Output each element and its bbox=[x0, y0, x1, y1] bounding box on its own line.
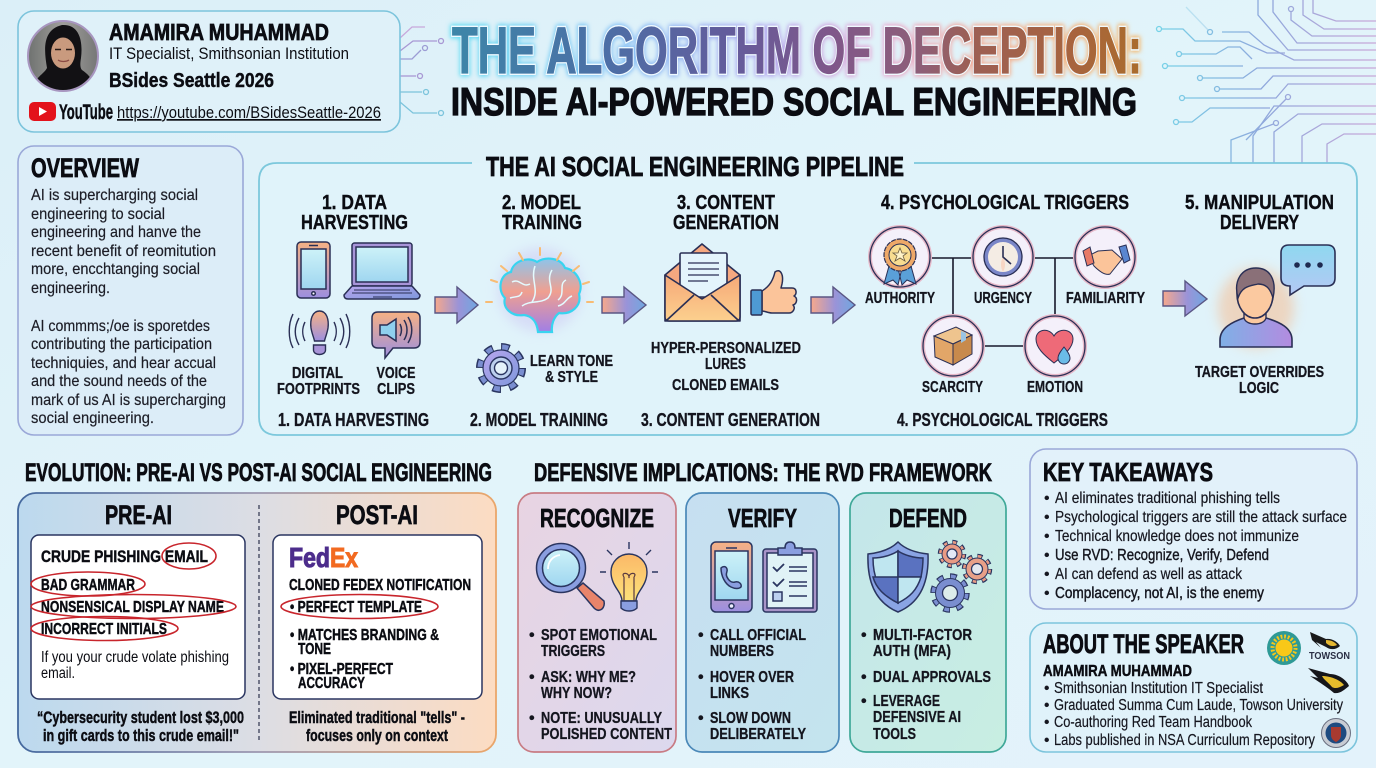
label: learn tone and style: LEARN TONE bbox=[530, 353, 613, 370]
step 5: manipulation delivery bbox=[1185, 192, 1335, 397]
event name: BSides Seattle 2026 bbox=[109, 70, 274, 92]
label: digital footprints bbox=[277, 365, 360, 398]
takeaways list bbox=[1044, 490, 1347, 602]
logo: smithsonian sun bbox=[1267, 631, 1301, 665]
verify list: SLOW DOWN bbox=[710, 710, 791, 727]
panel: about the speaker: ABOUT THE SPEAKER bbox=[1043, 629, 1244, 659]
panel: recognize: RECOGNIZE bbox=[540, 503, 654, 533]
heading: defensive implications: DEFENSIVE IMPLICATIONS: THE RVD FRAMEWORK bbox=[534, 459, 992, 487]
logo: fedex: Ex bbox=[330, 542, 358, 573]
verify list bbox=[698, 627, 806, 743]
icon: magnifying glass bbox=[536, 544, 604, 610]
step 5: manipulation delivery: 5. MANIPULATION bbox=[1185, 192, 1334, 214]
recognize list: NOTE: UNUSUALLY bbox=[541, 710, 662, 727]
arrow: step 2 to 3 bbox=[602, 287, 646, 323]
takeaways list: Complacency, not AI, is the enemy bbox=[1055, 585, 1264, 602]
step 1: data harvesting: HARVESTING bbox=[301, 212, 408, 234]
cloned fedex card: ACCURACY bbox=[298, 675, 365, 692]
defend list: • bbox=[861, 669, 867, 686]
column: post-AI: POST-AI bbox=[336, 500, 418, 530]
step 4: psychological triggers bbox=[865, 192, 1145, 430]
defend list: DUAL APPROVALS bbox=[873, 669, 991, 686]
recognize list: ASK: WHY ME? bbox=[541, 669, 636, 686]
speaker portrait bbox=[28, 21, 98, 92]
icon: smartphone bbox=[297, 242, 330, 298]
post-AI note: Eliminated traditional "tells" - bbox=[289, 708, 465, 727]
defend list: • bbox=[861, 693, 867, 710]
crude phishing email card: If you your crude volate phishing bbox=[41, 649, 229, 666]
panel: key takeaways: KEY TAKEAWAYS bbox=[1043, 457, 1213, 487]
defend list: • bbox=[861, 627, 867, 644]
takeaways list: AI can defend as well as attack bbox=[1055, 566, 1243, 583]
cloned fedex card: • PERFECT TEMPLATE bbox=[290, 599, 422, 616]
cloned fedex card: TONE bbox=[298, 641, 331, 658]
crude phishing email card: BAD GRAMMAR bbox=[41, 577, 135, 594]
step 4: psychological triggers: 4. PSYCHOLOGICAL TRIGGERS bbox=[881, 192, 1129, 214]
label: digital footprints: DIGITAL bbox=[292, 365, 343, 382]
overview paragraph two: contributing the participation bbox=[31, 336, 212, 353]
panel: defend: DEFEND bbox=[889, 503, 967, 533]
logo: towson small tiger: TOWSON bbox=[1309, 651, 1350, 662]
speaker bio list: Co-authoring Red Team Handbook bbox=[1054, 714, 1252, 731]
arrow: step 4 to 5 bbox=[1163, 281, 1207, 316]
logo: fedex: Fed bbox=[289, 542, 330, 573]
step 3: content generation bbox=[641, 192, 820, 430]
speaker bio list: • bbox=[1044, 732, 1049, 749]
defend list: AUTH (MFA) bbox=[873, 643, 951, 660]
overview paragraph one: AI is supercharging social bbox=[31, 187, 198, 204]
caption: psychological triggers: 4. PSYCHOLOGICAL TRIGGERS bbox=[897, 410, 1108, 430]
speaker name: AMAMIRA MUHAMMAD bbox=[1043, 663, 1192, 680]
overview paragraph one bbox=[31, 187, 216, 297]
icon: shield bbox=[868, 542, 928, 612]
takeaways list: • bbox=[1044, 566, 1050, 583]
takeaways list: Technical knowledge does not immunize bbox=[1055, 528, 1299, 545]
logo: towson small tiger bbox=[1309, 632, 1350, 662]
verify list: • bbox=[698, 710, 704, 727]
pre-AI quote bbox=[37, 708, 244, 745]
speaker role: IT Specialist, Smithsonian Institution bbox=[109, 44, 349, 63]
pipeline heading: THE AI SOCIAL ENGINEERING PIPELINE bbox=[486, 151, 904, 182]
overview paragraph two: social engineering. bbox=[31, 410, 154, 427]
label: voice clips: CLIPS bbox=[377, 381, 415, 398]
step 1: data harvesting: 1. DATA bbox=[322, 192, 387, 214]
youtube link: https://youtube.com/BSidesSeattle-2026 bbox=[117, 103, 381, 122]
verify list: • bbox=[698, 627, 704, 644]
takeaways list: Use RVD: Recognize, Verify, Defend bbox=[1055, 547, 1269, 564]
defend list: MULTI-FACTOR bbox=[873, 627, 972, 644]
takeaways list: • bbox=[1044, 490, 1050, 507]
arrow: step 1 to 2 bbox=[435, 287, 478, 323]
verify list: DELIBERATELY bbox=[710, 726, 806, 743]
step 3: content generation: GENERATION bbox=[673, 212, 779, 234]
cloned fedex card: CLONED FEDEX NOTIFICATION bbox=[289, 577, 471, 594]
recognize list bbox=[529, 627, 672, 743]
overview paragraph two bbox=[31, 318, 226, 427]
verify list: CALL OFFICIAL bbox=[710, 627, 806, 644]
label: voice clips bbox=[376, 365, 416, 398]
icon: light bulb bbox=[600, 542, 658, 611]
post-AI note: focuses only on context bbox=[306, 726, 448, 745]
step 2: model training: 2. MODEL bbox=[502, 192, 581, 214]
crude phishing email card: INCORRECT INITIALS bbox=[41, 621, 167, 638]
icon: small gear peach bbox=[965, 557, 989, 581]
caption: model training: 2. MODEL TRAINING bbox=[470, 410, 608, 430]
step 5: manipulation delivery: DELIVERY bbox=[1220, 212, 1300, 234]
column: pre-AI bbox=[31, 500, 245, 745]
trigger: emotion: EMOTION bbox=[1027, 379, 1083, 396]
crude phishing email card: CRUDE PHISHING EMAIL bbox=[41, 547, 208, 566]
crude phishing email card: email. bbox=[41, 665, 75, 682]
icon: checklist clipboard bbox=[763, 542, 817, 612]
cloned fedex card bbox=[273, 535, 482, 699]
icon: laptop bbox=[344, 243, 420, 299]
label: target overrides logic: LOGIC bbox=[1239, 380, 1279, 397]
label: hyper-personalized lures: LURES bbox=[705, 356, 746, 373]
icon: small gear orange bbox=[941, 543, 963, 565]
label: target overrides logic: TARGET OVERRIDES bbox=[1195, 364, 1324, 381]
icon: glowing brain bbox=[486, 248, 593, 332]
panel: defend bbox=[850, 493, 1006, 752]
trigger: emotion bbox=[1025, 316, 1085, 396]
icon: phone call bbox=[711, 542, 752, 612]
trigger: scarcity: SCARCITY bbox=[922, 379, 983, 396]
overview paragraph one: engineering. bbox=[31, 280, 110, 297]
icon: large gear blue bbox=[934, 577, 966, 609]
overview paragraph one: engineering and hanve the bbox=[31, 224, 201, 241]
icon: target person bbox=[1218, 268, 1294, 348]
speaker bio list bbox=[1044, 680, 1343, 749]
takeaways list: • bbox=[1044, 547, 1050, 564]
icon: open envelope bbox=[665, 244, 740, 321]
panel: speaker card bbox=[18, 11, 400, 132]
label: learn tone and style: & STYLE bbox=[545, 369, 598, 386]
overview paragraph two: and the sound needs of the bbox=[31, 373, 207, 390]
label: digital footprints: FOOTPRINTS bbox=[277, 381, 360, 398]
speaker bio list: Smithsonian Institution IT Specialist bbox=[1054, 680, 1264, 697]
speaker bio list: • bbox=[1044, 697, 1049, 714]
trigger: urgency bbox=[973, 227, 1033, 307]
panel: key takeaways bbox=[1030, 449, 1357, 609]
step 2: model training bbox=[470, 192, 613, 430]
panel: AI social engineering pipeline bbox=[259, 151, 1357, 435]
trigger: authority bbox=[865, 227, 935, 307]
icon: thumbs up bbox=[751, 271, 797, 315]
takeaways list: • bbox=[1044, 509, 1050, 526]
step 1: data harvesting bbox=[277, 192, 429, 430]
label: voice clips: VOICE bbox=[376, 365, 416, 382]
recognize list: • bbox=[529, 669, 535, 686]
caption: content generation: 3. CONTENT GENERATION bbox=[641, 410, 820, 430]
crude phishing email card bbox=[31, 535, 245, 699]
trigger: urgency: URGENCY bbox=[974, 290, 1032, 307]
crude phishing email card: NONSENSICAL DISPLAY NAME bbox=[41, 599, 224, 616]
label: hyper-personalized lures bbox=[651, 340, 801, 373]
overview paragraph two: techniquies, and hear accual bbox=[31, 355, 216, 372]
recognize list: TRIGGERS bbox=[541, 643, 605, 660]
speaker bio list: Labs published in NSA Curriculum Repository bbox=[1054, 732, 1315, 749]
overview heading: OVERVIEW bbox=[31, 153, 139, 183]
panel: verify: VERIFY bbox=[728, 503, 797, 533]
label: hyper-personalized lures: HYPER-PERSONALIZED bbox=[651, 340, 801, 357]
overview paragraph one: more, encchtanging social bbox=[31, 261, 200, 278]
label: target overrides logic bbox=[1195, 364, 1324, 397]
takeaways list: AI eliminates traditional phishing tells bbox=[1055, 490, 1280, 507]
verify list: LINKS bbox=[710, 685, 749, 702]
verify list: HOVER OVER bbox=[710, 669, 794, 686]
heading: evolution: EVOLUTION: PRE-AI VS POST-AI SOCIAL ENGINEERING bbox=[25, 459, 492, 487]
column: post-AI bbox=[273, 500, 482, 745]
label: cloned emails: CLONED EMAILS bbox=[672, 377, 779, 394]
cloned fedex card: • MATCHES BRANDING & bbox=[290, 627, 439, 644]
defend list: TOOLS bbox=[873, 726, 916, 743]
youtube wordmark: YouTube bbox=[59, 101, 113, 124]
recognize list: • bbox=[529, 710, 535, 727]
defend list bbox=[861, 627, 991, 743]
icon: gear bbox=[481, 348, 521, 388]
panel: verify bbox=[686, 493, 839, 752]
overview paragraph one: engineering to social bbox=[31, 206, 165, 223]
panel: overview bbox=[18, 146, 243, 435]
trigger: familiarity: FAMILIARITY bbox=[1066, 290, 1145, 307]
post-AI note bbox=[289, 708, 465, 745]
recognize list: POLISHED CONTENT bbox=[541, 726, 672, 743]
pre-AI quote: “Cybersecurity student lost $3,000 bbox=[37, 708, 244, 727]
speaker bio list: • bbox=[1044, 680, 1049, 697]
overview paragraph one: recent benefit of reomitution bbox=[31, 243, 216, 260]
arrow: step 3 to 4 bbox=[811, 287, 855, 323]
panel: recognize bbox=[518, 493, 676, 752]
verify list: • bbox=[698, 669, 704, 686]
logo: NSA seal bbox=[1322, 718, 1350, 748]
overview paragraph two: AI commms;/oe is sporetdes bbox=[31, 318, 210, 335]
trigger: familiarity bbox=[1066, 227, 1145, 307]
recognize list: SPOT EMOTIONAL bbox=[541, 627, 657, 644]
takeaways list: • bbox=[1044, 528, 1050, 545]
step 3: content generation: 3. CONTENT bbox=[677, 192, 775, 214]
trigger: scarcity bbox=[922, 316, 983, 396]
speaker name: AMAMIRA MUHAMMAD bbox=[109, 19, 329, 45]
logo: towson large tiger bbox=[1308, 668, 1349, 693]
panel: about the speaker bbox=[1030, 623, 1357, 752]
icon: voice clip bubble bbox=[372, 312, 420, 358]
icon: speech bubble bbox=[1281, 245, 1335, 295]
cloned fedex card: • PIXEL-PERFECT bbox=[290, 661, 393, 678]
column: pre-AI: PRE-AI bbox=[105, 500, 172, 530]
trigger: authority: AUTHORITY bbox=[865, 290, 935, 307]
speaker bio list: • bbox=[1044, 714, 1049, 731]
recognize list: • bbox=[529, 627, 535, 644]
label: learn tone and style bbox=[530, 353, 613, 386]
verify list: NUMBERS bbox=[710, 643, 774, 660]
recognize list: WHY NOW? bbox=[541, 685, 612, 702]
overview paragraph two: mark of us AI is supercharging bbox=[31, 392, 226, 409]
pre-AI quote: in gift cards to this crude email!" bbox=[43, 726, 239, 745]
icon: digital footprint bbox=[289, 311, 350, 354]
subtitle: INSIDE AI-POWERED SOCIAL ENGINEERING bbox=[451, 81, 1137, 124]
defend list: DEFENSIVE AI bbox=[873, 709, 961, 726]
step 2: model training: TRAINING bbox=[502, 212, 582, 234]
panel: evolution comparison bbox=[18, 493, 496, 752]
caption: data harvesting: 1. DATA HARVESTING bbox=[278, 410, 429, 430]
defend list: LEVERAGE bbox=[873, 693, 940, 710]
takeaways list: • bbox=[1044, 585, 1050, 602]
icon: youtube logo bbox=[29, 102, 56, 121]
